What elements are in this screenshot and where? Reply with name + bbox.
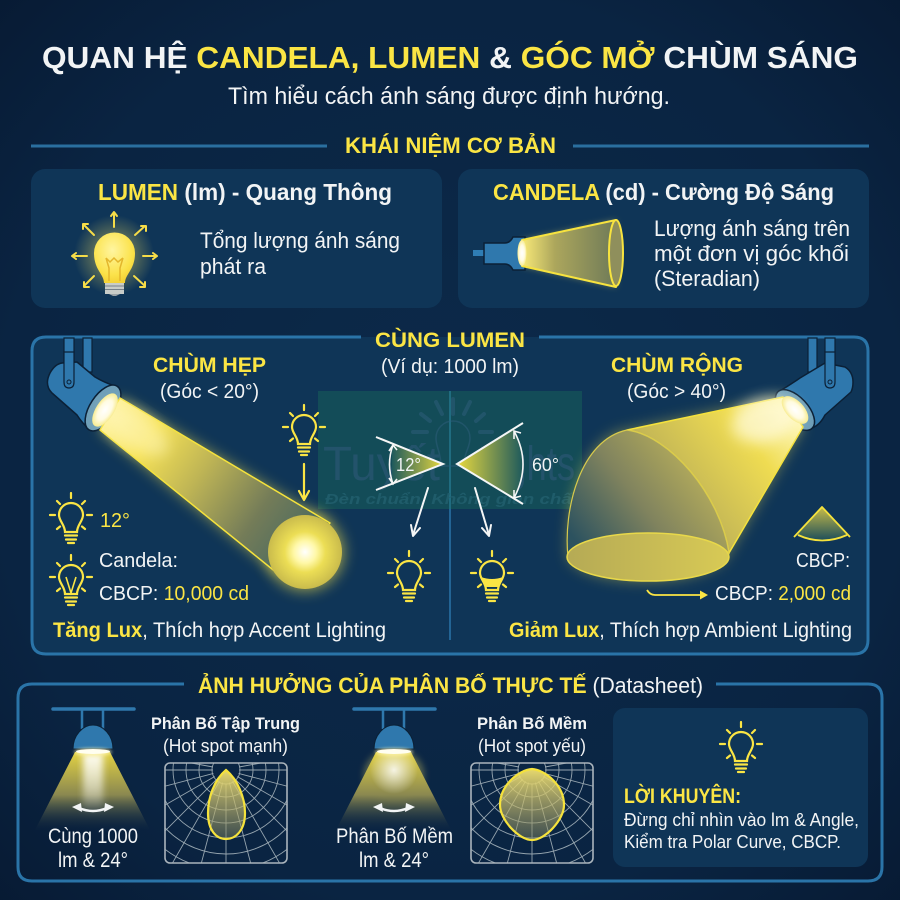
lumen heading: LUMEN (lm) - Quang Thông [98,179,392,205]
narrow beam conclusion: Tăng Lux, Thích hợp Accent Lighting [53,619,386,642]
narrow beam angle stat: 12° [100,510,130,532]
wide beam heading [611,353,743,403]
narrow beam candela stat [50,550,249,605]
watermark [318,391,582,509]
narrow beam candela stat: CBCP: 10,000 cd [99,583,249,605]
advice text [624,810,859,852]
icon: bulb above arrow [283,405,325,455]
panel: same lumen comparison [32,328,868,654]
candela description: một đơn vị góc khối [654,241,849,266]
narrow beam heading: (Góc < 20°) [160,381,259,403]
icon: small wide angle [794,507,850,540]
distribution heading: ẢNH HƯỞNG CỦA PHÂN BỐ THỰC TẾ (Datasheet) [198,672,703,698]
wide beam heading: CHÙM RỘNG [611,353,743,377]
soft polar heading [477,714,587,756]
advice heading: LỜI KHUYÊN: [624,784,741,808]
concentrated polar heading: (Hot spot mạnh) [163,736,288,756]
same lumen example: (Ví dụ: 1000 lm) [381,356,519,378]
wide beam heading: (Góc > 40°) [627,381,726,403]
soft lamp caption: lm & 24° [359,849,429,872]
diagram: 12 degree angle: 12° [396,455,421,475]
heading: basic concepts: KHÁI NIỆM CƠ BẢN [345,133,556,158]
concentrated polar chart [66,670,386,900]
candela description: Lượng ánh sáng trên [654,216,850,241]
wide beam conclusion: Giảm Lux, Thích hợp Ambient Lighting [509,619,852,642]
narrow beam angle stat [50,493,130,543]
diagram: 60 degree angle: 60° [532,455,559,475]
soft polar heading: Phân Bố Mềm [477,714,587,733]
advice text: Kiểm tra Polar Curve, CBCP. [624,832,841,852]
lumen description [200,228,400,279]
panel: candela [458,169,869,308]
soft polar chart [372,670,692,900]
wide beam candela stat: CBCP: 2,000 cd [715,583,851,605]
watermark: Tuyết [323,438,440,491]
concentrated lamp caption [48,825,138,872]
title: QUAN HỆ CANDELA, LUMEN & GÓC MỞ CHÙM SÁNG [42,39,858,75]
arrow: wide angle to bulb [475,488,491,536]
soft lamp caption: Phân Bố Mềm [336,825,453,848]
narrow beam candela stat: Candela: [99,550,178,572]
arrow: bulb to narrow spot [299,464,309,500]
concentrated polar heading [151,714,300,756]
panel: advice [613,708,868,867]
candela description: (Steradian) [654,266,760,291]
icon: glowing bulb with arrows [72,212,157,296]
narrow spotlight and beam [47,338,344,591]
same lumen heading: CÙNG LUMEN [375,328,525,352]
soft polar heading: (Hot spot yếu) [478,736,586,756]
candela heading: CANDELA (cd) - Cường Độ Sáng [493,179,834,205]
wide beam candela stat: CBCP: [796,550,850,572]
panel: real distribution [18,670,882,900]
watermark: Đèn chuẩn. Không gian chất [325,492,580,508]
narrow beam heading [153,353,266,403]
diagram: 12 degree angle [376,437,443,490]
icon: advice bulb [720,722,762,772]
soft lamp caption [336,825,453,872]
lumen description: Tổng lượng ánh sáng [200,228,400,253]
diagram: 60 degree angle [457,423,559,504]
soft lamp [336,709,451,830]
lumen description: phát ra [200,254,267,279]
wide spotlight and dome [567,338,853,581]
watermark: Lights [478,438,575,491]
icon: flashlight cone [473,220,623,287]
arrow: to candela value [647,590,708,600]
icon: bulb high lux [388,551,430,601]
candela description [654,216,850,291]
concentrated lamp caption: lm & 24° [58,849,128,872]
concentrated polar heading: Phân Bố Tập Trung [151,714,300,733]
concentrated lamp [35,709,150,830]
panel: lumen [31,169,442,308]
arrow: narrow angle to bulb [411,488,428,536]
narrow beam heading: CHÙM HẸP [153,353,266,377]
advice text: Đừng chỉ nhìn vào lm & Angle, [624,810,859,830]
subtitle: Tìm hiểu cách ánh sáng được định hướng. [228,83,670,110]
icon: bulb half filled [471,551,513,601]
concentrated lamp caption: Cùng 1000 [48,825,138,848]
wide beam candela stat [715,550,851,605]
